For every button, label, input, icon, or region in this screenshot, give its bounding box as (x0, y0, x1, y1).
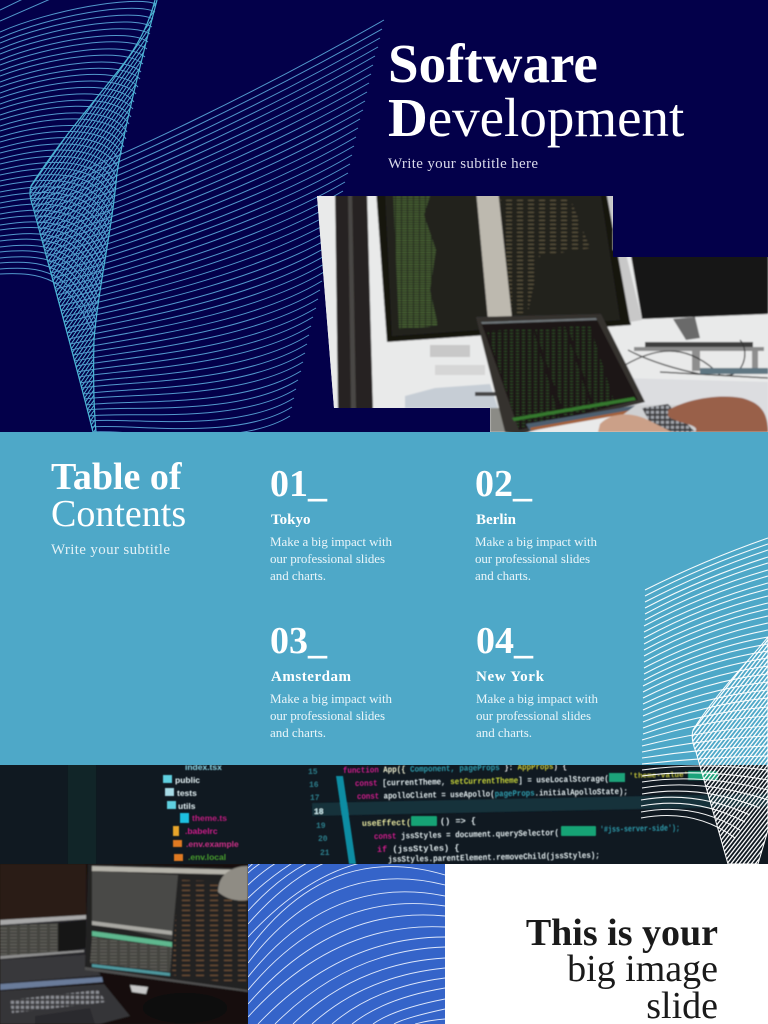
file tree: utils (178, 801, 196, 811)
item 03 Amsterdam: Amsterdam (271, 669, 352, 685)
line numbers: 18 (314, 808, 324, 817)
file tree: .babelrc (185, 826, 218, 836)
line numbers: 19 (316, 822, 326, 831)
file tree: theme.ts (192, 813, 227, 823)
code lines: () => { (440, 816, 476, 827)
mesh edge: bright fold (30, 0, 157, 432)
item 01 Tokyo (270, 463, 392, 583)
section subtitle: Write your subtitle (51, 542, 170, 558)
wave graphic: white lines on teal (641, 538, 768, 864)
wave lines: right family (30, 20, 384, 436)
file tree: .env.example (186, 839, 239, 849)
section title: table of contents: Contents (51, 493, 186, 535)
item 02 Berlin: Make a big impact with (475, 534, 598, 549)
line numbers: 20 (318, 835, 328, 844)
panel: navy cover background (0, 0, 768, 432)
item 02 Berlin: and charts. (475, 568, 531, 583)
item 02 Berlin: our professional slides (475, 551, 590, 566)
item 02 Berlin (475, 463, 598, 583)
heading: this is your big image slide: big image (567, 948, 718, 990)
photo: developer desk with monitors and laptop (310, 190, 768, 434)
line numbers: 15 (308, 768, 318, 777)
code lines: if (jssStyles) { (377, 843, 460, 855)
laptop base (0, 984, 130, 1024)
code image strip (0, 762, 768, 865)
item 01 Tokyo: Tokyo (271, 512, 310, 528)
item 02 Berlin: Berlin (476, 512, 517, 528)
code bar (336, 776, 356, 864)
item 03 Amsterdam: Make a big impact with (270, 691, 392, 706)
code lines: const apolloClient = useApollo(pageProps.initialApolloState); (357, 787, 628, 802)
code lines: '#jss-server-side'); (600, 823, 680, 835)
wave lines (641, 538, 768, 838)
laptop (476, 314, 645, 434)
line numbers: 16 (309, 781, 319, 790)
item 02 Berlin: 02_ (475, 463, 533, 505)
item 03 Amsterdam: and charts. (270, 725, 326, 740)
panel: white image slide (445, 864, 768, 1024)
file tree: index.tsx (185, 762, 222, 772)
item 01 Tokyo: our professional slides (270, 551, 385, 566)
title: Software (388, 33, 598, 94)
hands (598, 396, 768, 432)
code lines: const jssStyles = document.querySelector( (374, 828, 559, 842)
laptop screen (0, 915, 103, 990)
panel: blue wave lines (248, 855, 445, 1024)
title (388, 33, 684, 148)
item 04 New York: New York (476, 669, 545, 685)
line numbers: 17 (310, 794, 320, 803)
subtitle: Write your subtitle here (388, 156, 538, 172)
item 01 Tokyo: and charts. (270, 568, 326, 583)
mesh fold fill (30, 0, 157, 432)
file tree: tests (177, 788, 197, 798)
line numbers (308, 768, 330, 858)
code lines: useEffect( (362, 818, 411, 829)
section title: table of contents: Table of (51, 456, 183, 498)
title: Development (388, 87, 684, 148)
item 01 Tokyo: Make a big impact with (270, 534, 392, 549)
file tree: public (175, 775, 200, 785)
photo: laptop and monitor with terminal (0, 864, 248, 1024)
section title: table of contents (51, 456, 186, 535)
item 03 Amsterdam: 03_ (270, 620, 328, 662)
arc lines (248, 855, 445, 1024)
code lines: 'theme-value', (629, 772, 693, 781)
monitor one (376, 190, 631, 342)
item 04 New York: 04_ (476, 620, 534, 662)
lamp (218, 866, 248, 901)
item 01 Tokyo: 01_ (270, 463, 328, 505)
code lines: const [currentTheme, setCurrentTheme] = useLocalStorage( (355, 774, 609, 789)
monitor two (625, 250, 768, 378)
code lines: jssStyles.parentElement.removeChild(jssStyles); (388, 851, 600, 865)
item 04 New York: and charts. (476, 725, 532, 740)
file tree: .env.local (188, 852, 226, 862)
item 04 New York: our professional slides (476, 708, 591, 723)
code lines: function App({ Component, pageProps }: AppProps) { (343, 762, 567, 776)
item 04 New York (476, 620, 598, 740)
item 04 New York: Make a big impact with (476, 691, 598, 706)
mesh fold (692, 637, 768, 864)
desktop monitor (85, 864, 248, 992)
file tree (163, 762, 239, 862)
wave lines: left family (0, 0, 156, 334)
item 03 Amsterdam: our professional slides (270, 708, 385, 723)
code lines (343, 762, 718, 865)
heading: this is your big image slide (526, 912, 718, 1024)
line numbers: 21 (320, 849, 330, 858)
wave graphic: blue line mesh (0, 0, 384, 436)
heading: this is your big image slide: This is your (526, 912, 718, 954)
item 03 Amsterdam (270, 620, 392, 740)
panel: table of contents (0, 432, 768, 765)
